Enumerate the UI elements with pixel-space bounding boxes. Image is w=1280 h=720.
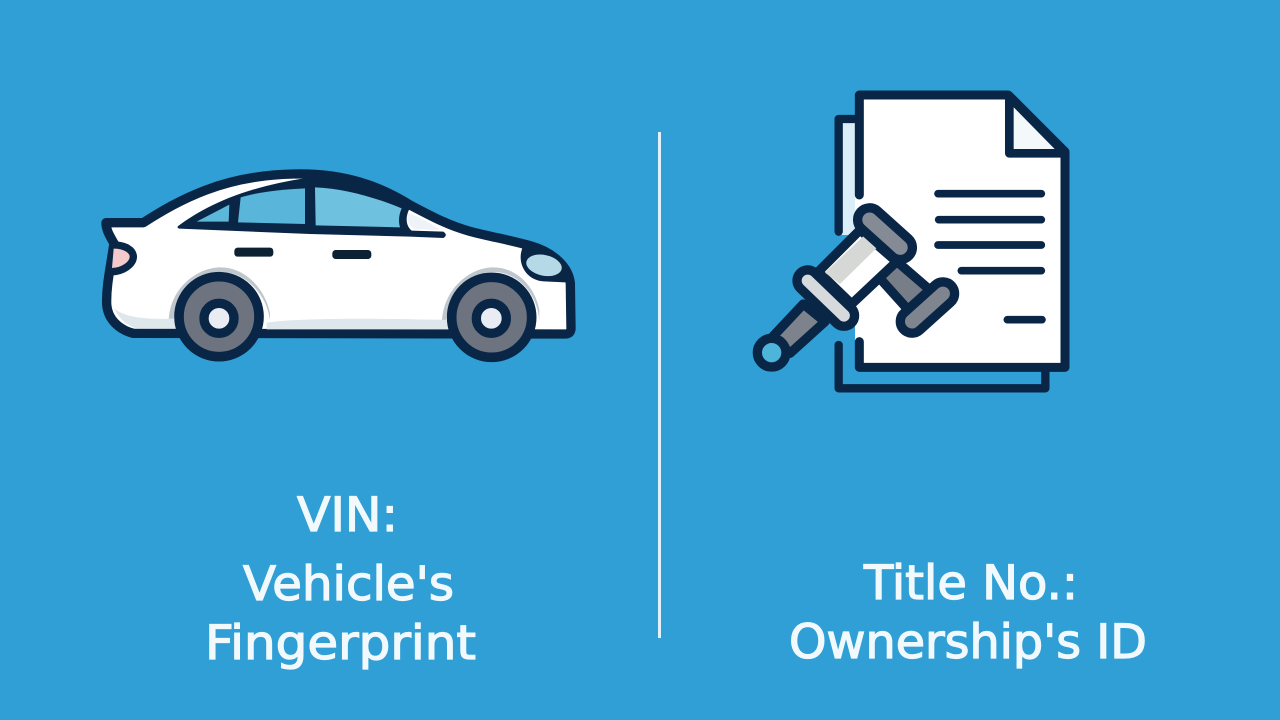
divider between panels <box>658 132 661 638</box>
rear wheel <box>179 277 259 357</box>
icon: document with gavel <box>757 95 1065 388</box>
gavel <box>757 203 959 367</box>
top face <box>853 203 917 264</box>
icon: car <box>106 173 571 357</box>
heading: Fingerprint: Fingerprint <box>205 616 476 671</box>
right face <box>895 277 959 338</box>
handle end cap <box>757 338 786 367</box>
rear door window <box>238 188 305 224</box>
front wheel arch <box>442 267 539 320</box>
front sheet <box>855 95 1065 367</box>
rear lower shading <box>114 308 177 329</box>
lower body shading <box>267 319 448 329</box>
text lines <box>938 194 1042 320</box>
tail light <box>112 245 133 272</box>
door handles <box>234 248 273 257</box>
headlight <box>521 247 570 283</box>
gavel handle <box>773 304 825 353</box>
rear quarter window <box>197 205 229 222</box>
front wheel <box>452 277 532 357</box>
front door window <box>315 187 402 227</box>
front arch inner <box>446 272 539 323</box>
side mirror <box>407 213 439 230</box>
rear wheel arch <box>169 267 270 320</box>
back sheet <box>839 119 1045 388</box>
heading: Ownership's ID: Ownership's ID <box>789 615 1147 670</box>
window frame and roof <box>177 173 446 238</box>
striking neck <box>878 261 930 310</box>
car body <box>106 174 571 334</box>
heading: Title No.: Title No.: <box>863 556 1078 611</box>
heading: VIN: VIN: <box>297 488 398 543</box>
left band <box>793 266 859 331</box>
rear arch inner <box>173 272 270 323</box>
folded corner <box>1009 97 1065 153</box>
heading: Vehicle's: Vehicle's <box>243 557 454 612</box>
gavel head body <box>818 230 897 304</box>
